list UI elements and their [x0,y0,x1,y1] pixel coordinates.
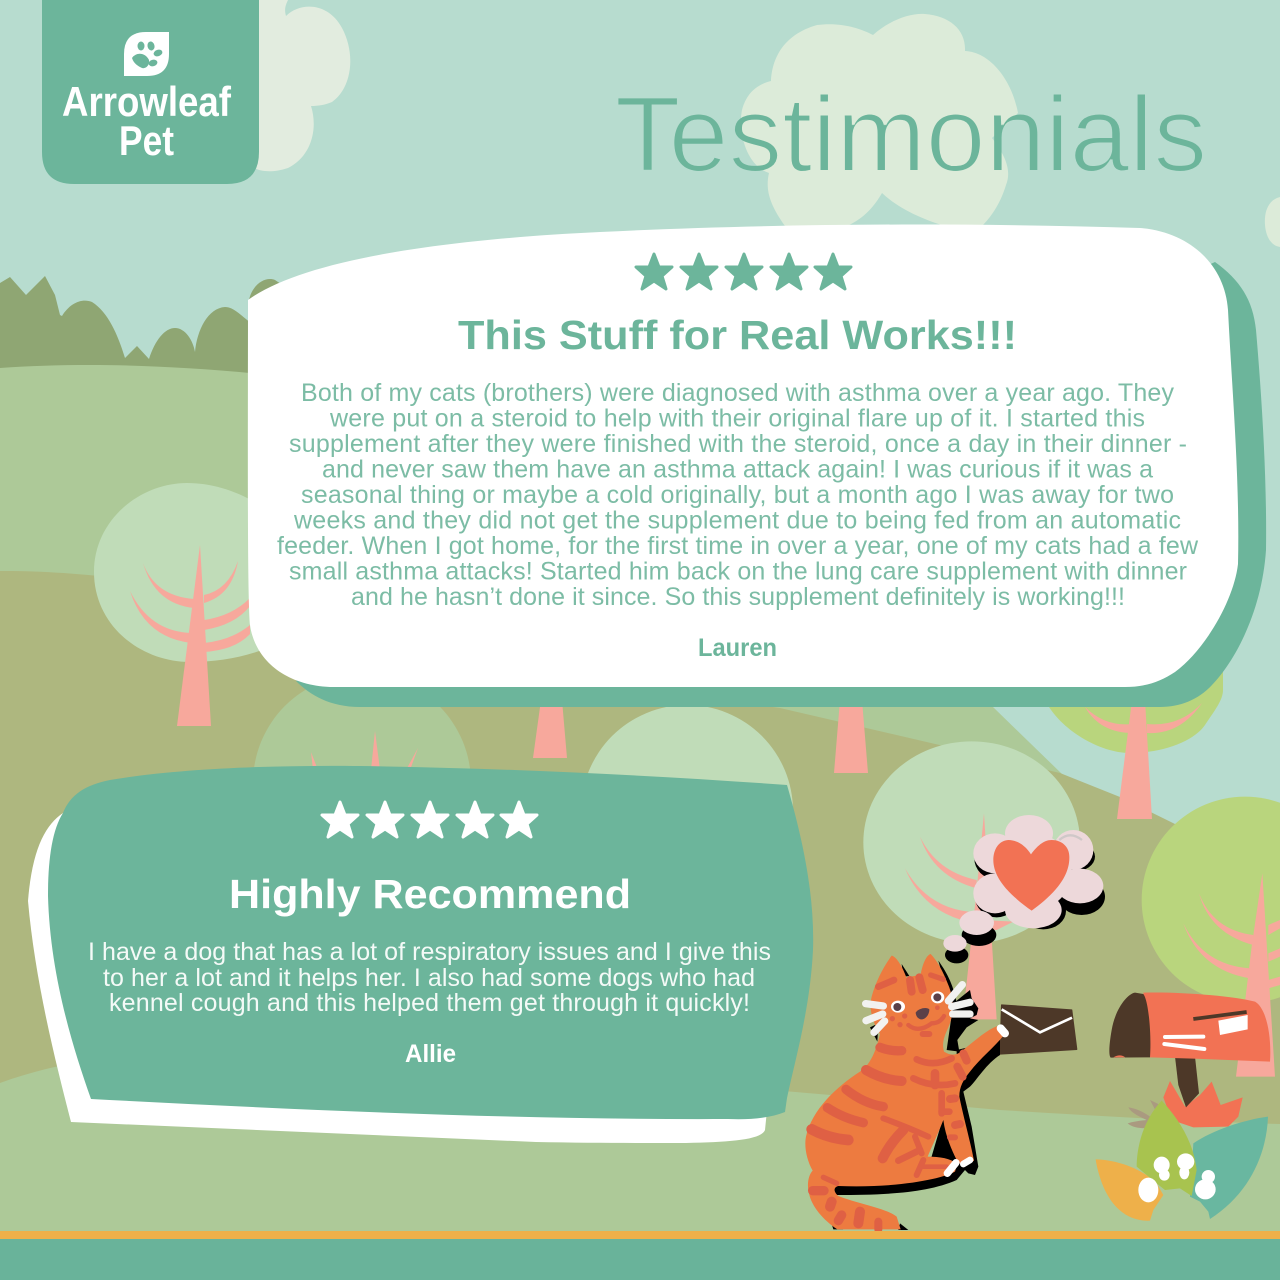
review text [277,379,1199,611]
front hill [0,1060,1280,1240]
cat whiskers and paws [866,985,1005,1173]
logo badge: Pet [119,117,174,164]
cat body [805,954,1004,1229]
distant bush [249,279,290,310]
cloud behind title [741,14,1018,226]
light green hill [0,365,1063,800]
cat shadow [830,961,1000,1230]
review text [88,938,771,1017]
post [1175,1057,1199,1107]
distant tree line [0,276,260,385]
review text: feeder. When I got home, for the first time in over a year, one of my cats had a few [277,532,1199,560]
bubble [943,815,1103,952]
leaf: green [1137,1101,1197,1196]
review text: supplement after they were finished with the steroid, once a day in their dinner - [289,430,1187,458]
star rating [322,802,537,837]
footer band [0,1239,1280,1280]
leaf: orange [1096,1159,1163,1221]
tree trunk behind card [533,700,567,758]
small cloud right edge [1265,197,1280,247]
tree: left [94,483,300,726]
tree: upper right [1045,650,1223,819]
tree: far right [1142,797,1280,1077]
leaf: teal [1190,1117,1268,1219]
post flower [1163,1081,1243,1127]
review text: kennel cough and this helped them get through it quickly! [109,989,750,1017]
card shadow [28,813,767,1143]
cat face [890,991,944,1027]
icon: heart [993,840,1069,911]
cloud behind logo [250,0,350,171]
card shadow [296,262,1266,707]
panel: review two [28,766,813,1143]
heading: This Stuff for Real Works!!! [458,312,1017,358]
review text: and he hasn’t done it since. So this supplement definitely is working!!! [351,583,1125,611]
review text: Both of my cats (brothers) were diagnosed with asthma over a year ago. They [301,379,1174,407]
box [1143,993,1270,1062]
footer stripe [0,1231,1280,1239]
star rating [636,254,851,289]
reviewer name: Allie [405,1040,456,1068]
review text: I have a dog that has a lot of respiratory issues and I give this [88,938,771,966]
card [248,225,1238,687]
cat holding envelope [805,954,1005,1230]
bubble shadow [945,838,1105,963]
review text: small asthma attacks! Started him back on the lung care supplement with dinner [289,558,1187,586]
review text: seasonal thing or maybe a cold originally, but a month ago I was away for two [301,481,1174,509]
thought bubble with heart [943,815,1105,963]
cat stripes [812,975,967,1229]
tree trunk behind card [834,700,868,773]
card [48,766,813,1119]
paw prints [1138,1153,1216,1202]
tree: middle dome [581,705,793,917]
review text: were put on a steroid to help with their original flare up of it. I started this [329,404,1145,432]
icon: paw in leaf [124,32,169,76]
review text: and never saw them have an asthma attack again! I was curious if it was a [322,456,1153,484]
panel: review one [248,225,1266,707]
review text: to her a lot and it helps her. I also had some dogs who had [103,964,755,992]
title: Testimonials [615,74,1207,194]
heading: Highly Recommend [229,871,631,917]
envelope [1000,1005,1077,1054]
tree: middle left dome [253,674,471,892]
plant [1128,1100,1158,1128]
tree: center right [863,741,1080,1019]
reviewer name: Lauren [698,634,777,662]
logo badge [42,0,259,184]
mailbox with plant and leaves [1096,993,1270,1221]
olive hill [0,571,1280,1130]
logo wordmark: Arrowleaf [62,78,232,125]
flag and lines [1193,1012,1247,1019]
review text: weeks and they did not get the supplement due to being fed from an automatic [293,506,1181,534]
